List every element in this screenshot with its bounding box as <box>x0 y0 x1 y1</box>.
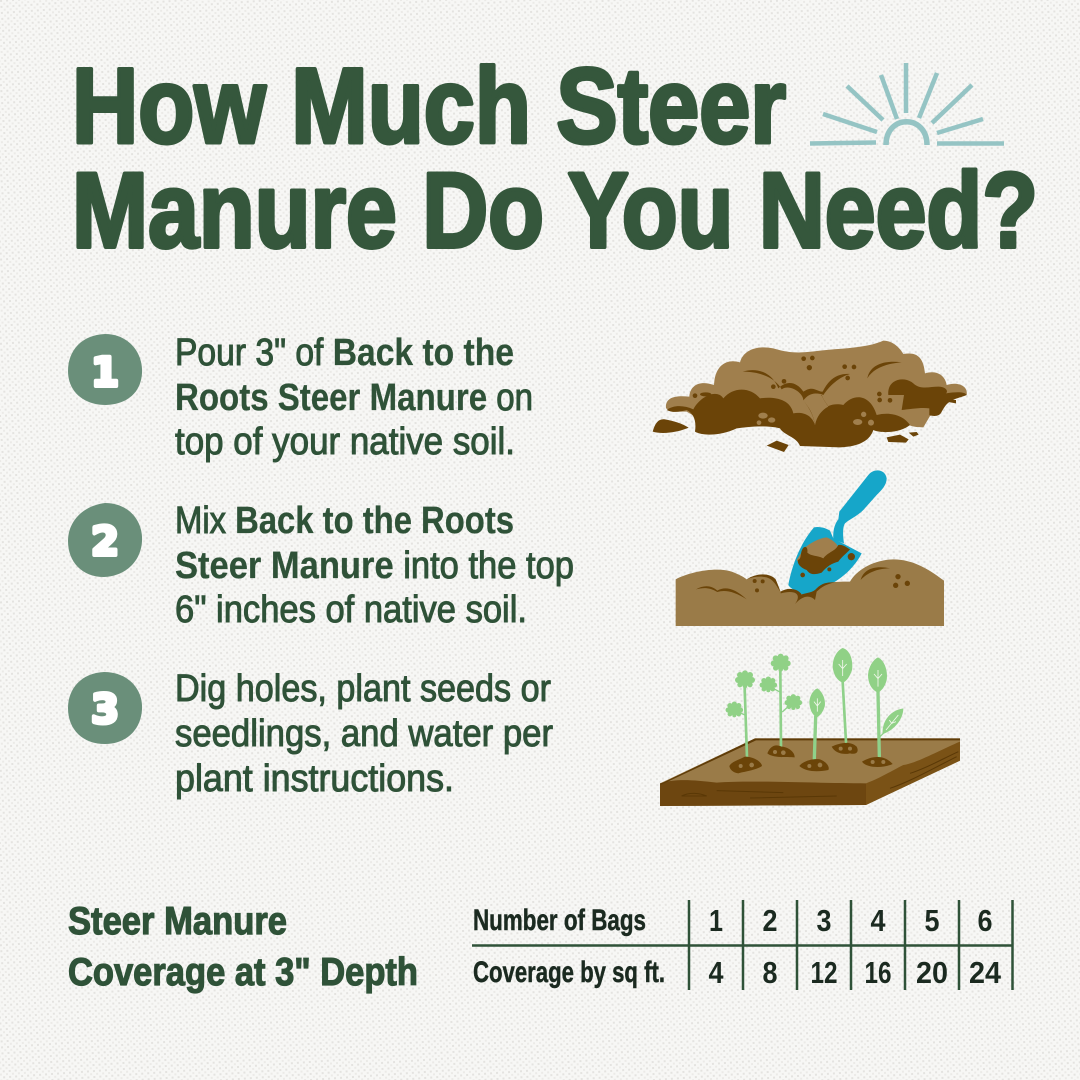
step 2 text line 2: Steer Manure into the top <box>175 545 574 587</box>
coverage table: 24 <box>969 955 1002 990</box>
coverage table: 6 <box>978 903 992 938</box>
illustration: planted bed <box>660 648 960 806</box>
coverage table: 3 <box>816 903 832 938</box>
icon: sun <box>810 63 1004 145</box>
trowel soil <box>797 537 855 577</box>
subheading: coverage: Steer Manure <box>68 900 287 943</box>
step 3 text line 3: plant instructions. <box>175 758 454 800</box>
coverage table: 2 <box>762 903 778 938</box>
coverage table: 4 <box>708 955 724 990</box>
soil clumps <box>729 743 893 773</box>
coverage table <box>472 900 1012 990</box>
coverage table: Number of Bags <box>473 904 646 937</box>
broad leaves <box>809 648 903 734</box>
illustration: trowel in soil <box>676 470 944 626</box>
coverage table: 5 <box>924 903 940 938</box>
subheading: coverage: Coverage at 3" Depth <box>68 951 418 994</box>
leaf: cilantro 4 <box>785 694 802 710</box>
coverage table: 8 <box>762 955 778 990</box>
step 2 text line 3: 6" inches of native soil. <box>175 589 527 631</box>
step 1 text line 2: Roots Steer Manure on <box>175 377 533 419</box>
step 3 text line 2: seedlings, and water per <box>175 713 553 755</box>
step 3 badge <box>68 672 142 744</box>
step 3 text: Dig holes, plant seeds or <box>175 668 551 710</box>
step 3 badge: 3 <box>91 687 119 733</box>
stems <box>733 672 888 759</box>
soil mound <box>676 559 944 626</box>
step 1 badge: 1 <box>91 350 119 396</box>
leaf: cilantro 3 <box>760 676 777 692</box>
subheading: coverage <box>68 900 418 994</box>
leaf: cilantro 5 <box>726 701 743 717</box>
title: How Much Steer <box>72 46 786 166</box>
step 1 badge <box>68 334 142 405</box>
title <box>72 46 1038 270</box>
step 1 text: Pour 3" of Back to the <box>175 332 514 374</box>
soil bed <box>660 738 960 806</box>
leaf: cilantro 1 <box>735 670 755 688</box>
leaf: cilantro 2 <box>771 654 791 672</box>
coverage table: 4 <box>870 903 886 938</box>
step 2 text: Mix Back to the Roots <box>175 500 514 542</box>
coverage table: 12 <box>810 955 838 990</box>
trowel <box>788 470 887 595</box>
coverage table: 1 <box>709 903 723 938</box>
step 2 badge <box>68 503 142 577</box>
coverage table: Coverage by sq ft. <box>473 956 665 989</box>
step 2 badge: 2 <box>91 519 119 565</box>
step 1 text line 3: top of your native soil. <box>175 421 515 463</box>
coverage table: 20 <box>916 955 948 990</box>
coverage table: 16 <box>864 955 892 990</box>
illustration: manure pile <box>653 341 967 452</box>
